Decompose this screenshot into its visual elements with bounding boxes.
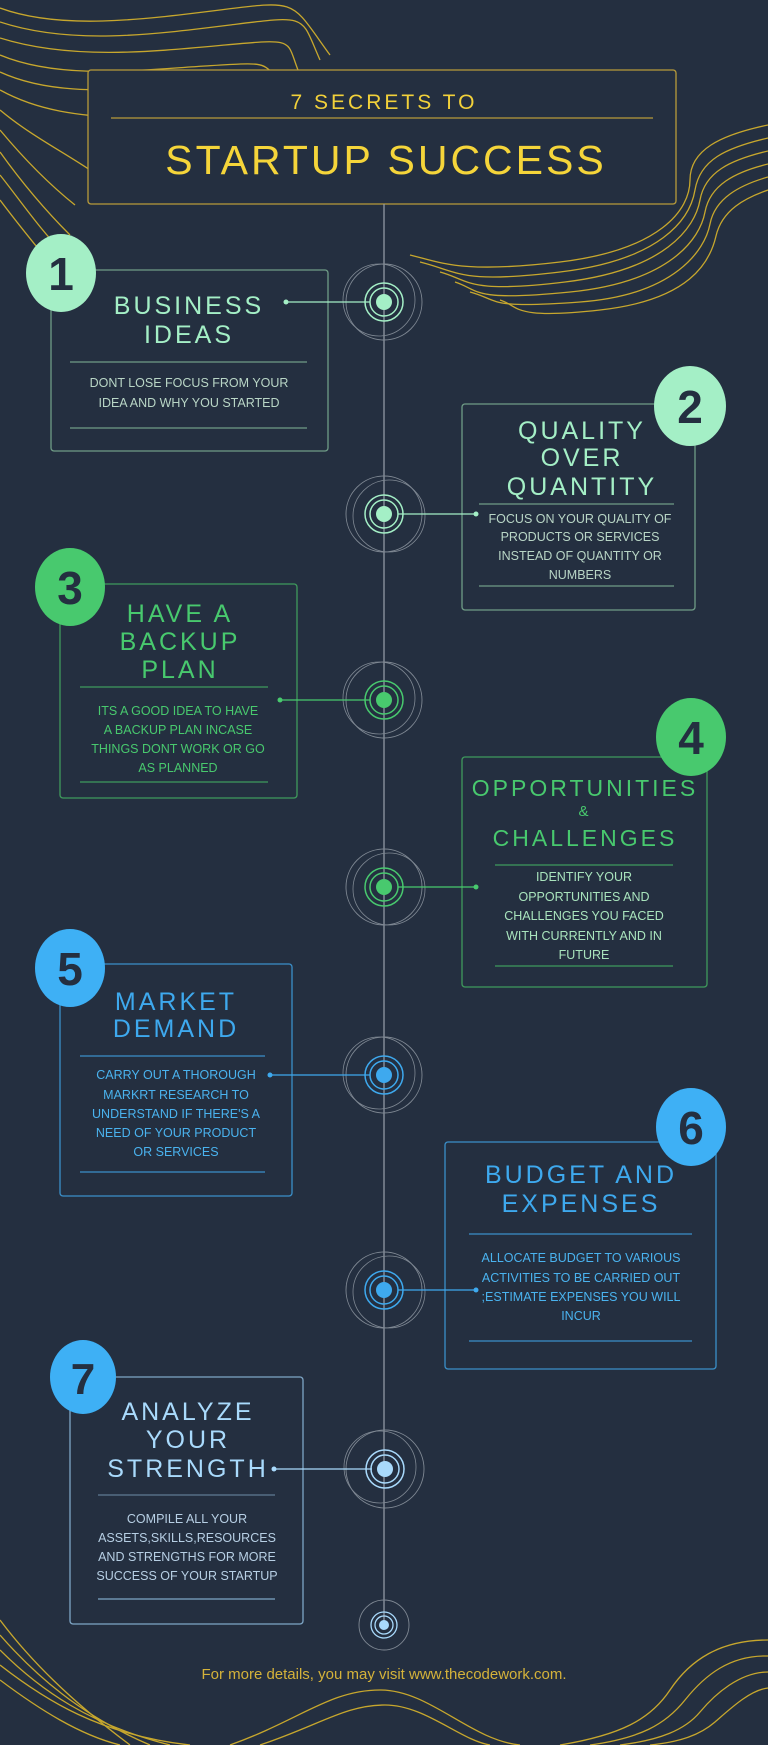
panel 2: quality over quantity: NUMBERS [549, 568, 611, 582]
panel 1: business ideas: IDEA AND WHY YOU STARTED [98, 396, 280, 410]
panel 4: opportunities & challenges: OPPORTUNITIES AND [518, 890, 650, 904]
badge 5 [35, 929, 105, 1007]
panel 6: budget and expenses: INCUR [561, 1309, 601, 1323]
badge 2 [654, 366, 726, 446]
badge 1: 1 [48, 248, 74, 300]
panel 2: quality over quantity [398, 366, 726, 610]
panel 1: business ideas: IDEAS [144, 321, 234, 349]
node 1 [343, 264, 422, 340]
title: 7 SECRETS TO [291, 91, 477, 114]
panel 3: backup plan: THINGS DONT WORK OR GO [91, 742, 265, 756]
panel 7: analyze your strength: YOUR [146, 1426, 230, 1454]
panel 7: analyze your strength [50, 1340, 372, 1624]
panel 5: market demand [35, 929, 370, 1196]
panel 4: opportunities & challenges [398, 698, 726, 987]
badge 3 [35, 548, 105, 626]
panel 5: market demand: OR SERVICES [133, 1145, 219, 1159]
panel 4: opportunities & challenges: OPPORTUNITIES [472, 775, 698, 801]
panel 2: quality over quantity: INSTEAD OF QUANTITY OR [498, 549, 662, 563]
panel 5: market demand: MARKRT RESEARCH TO [103, 1088, 249, 1102]
panel 2: quality over quantity: QUANTITY [507, 473, 657, 501]
panel 6: budget and expenses: ALLOCATE BUDGET TO VARIOUS [482, 1251, 680, 1265]
panel 5: market demand: MARKET [115, 988, 237, 1016]
panel 4: opportunities & challenges: IDENTIFY YOUR [536, 870, 632, 884]
panel 5: market demand: CARRY OUT A THOROUGH [96, 1068, 256, 1082]
panel 1: business ideas [26, 234, 370, 451]
panel 3: backup plan: ITS A GOOD IDEA TO HAVE [98, 704, 258, 718]
panel 2: quality over quantity: FOCUS ON YOUR QUALITY OF [489, 512, 672, 526]
node 5 [343, 1037, 422, 1113]
panel 1: business ideas: DONT LOSE FOCUS FROM YOUR [90, 376, 288, 390]
badge 3: 3 [57, 562, 83, 614]
panel 4: opportunities & challenges: CHALLENGES [493, 825, 677, 851]
end node [359, 1600, 409, 1650]
panel 7: analyze your strength: STRENGTH [107, 1455, 269, 1483]
node 4 [346, 849, 425, 925]
node 6 [346, 1252, 425, 1328]
panel 3: backup plan: BACKUP [120, 628, 240, 656]
panel 3: backup plan: A BACKUP PLAN INCASE [104, 723, 252, 737]
panel 3: backup plan: AS PLANNED [138, 761, 218, 775]
panel 1: business ideas: BUSINESS [114, 292, 264, 320]
panel 2: quality over quantity: OVER [541, 444, 623, 472]
node 2 [346, 476, 425, 552]
badge 4 [656, 698, 726, 776]
panel 4: opportunities & challenges: CHALLENGES YOU FACED [504, 909, 664, 923]
panel 6: budget and expenses: BUDGET AND [485, 1161, 677, 1189]
panel 6: budget and expenses [398, 1088, 726, 1369]
badge 7: 7 [71, 1355, 95, 1404]
panel 3: backup plan: HAVE A [127, 600, 233, 628]
panel 6: budget and expenses: EXPENSES [502, 1190, 660, 1218]
badge 6: 6 [678, 1102, 704, 1154]
panel 4: opportunities & challenges: WITH CURRENTLY AND IN [506, 929, 662, 943]
title: STARTUP SUCCESS [165, 137, 607, 183]
panel 5: market demand: NEED OF YOUR PRODUCT [96, 1126, 256, 1140]
badge 7 [50, 1340, 116, 1414]
badge 4: 4 [678, 712, 704, 764]
panel 6: budget and expenses: ;ESTIMATE EXPENSES YOU WILL [482, 1290, 680, 1304]
panel 4: opportunities & challenges: & [578, 803, 592, 820]
panel 7: analyze your strength: ANALYZE [121, 1398, 255, 1426]
panel 2: quality over quantity: QUALITY [518, 417, 646, 445]
panel 6: budget and expenses: ACTIVITIES TO BE CARRIED OUT [482, 1271, 680, 1285]
node 7 [344, 1430, 424, 1508]
badge 5: 5 [57, 943, 83, 995]
panel 4: opportunities & challenges: FUTURE [559, 948, 609, 962]
badge 6 [656, 1088, 726, 1166]
panel 7: analyze your strength: ASSETS,SKILLS,RESOURCES [98, 1531, 276, 1545]
node 3 [343, 662, 422, 738]
panel 5: market demand: UNDERSTAND IF THERE'S A [92, 1107, 261, 1121]
footer text: For more details, you may visit www.thecodework.com. [201, 1666, 567, 1683]
panel 7: analyze your strength: SUCCESS OF YOUR STARTUP [96, 1569, 278, 1583]
title [88, 70, 676, 204]
badge 1 [26, 234, 96, 312]
panel 7: analyze your strength: AND STRENGTHS FOR MORE [98, 1550, 276, 1564]
panel 3: backup plan [35, 548, 370, 798]
badge 2: 2 [677, 381, 703, 433]
panel 7: analyze your strength: COMPILE ALL YOUR [127, 1512, 247, 1526]
panel 5: market demand: DEMAND [113, 1015, 239, 1043]
panel 3: backup plan: PLAN [141, 656, 219, 684]
panel 2: quality over quantity: PRODUCTS OR SERVICES [501, 530, 659, 544]
